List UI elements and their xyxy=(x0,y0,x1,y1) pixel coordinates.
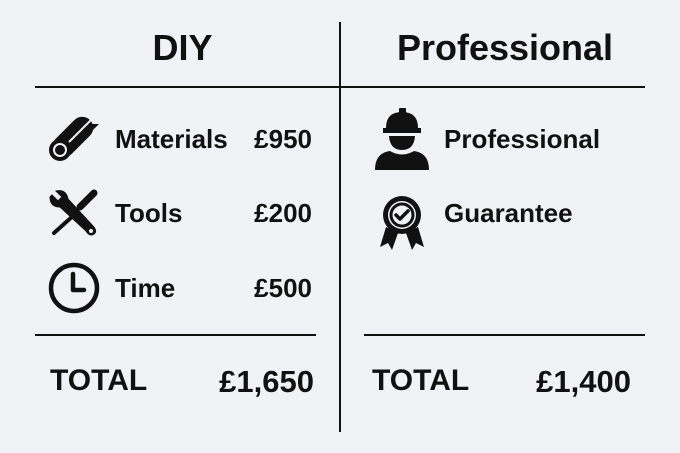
total rules xyxy=(35,334,316,336)
Professional total: TOTAL xyxy=(372,364,469,397)
icon: guarantee badge xyxy=(380,196,424,250)
value: 200: £200 xyxy=(254,198,312,228)
header rule xyxy=(35,86,645,88)
Professional total xyxy=(372,364,631,399)
Professional total: £1,400 xyxy=(536,364,631,399)
text: Professional: Professional xyxy=(444,124,600,154)
value: 950: £950 xyxy=(254,124,312,154)
DIY total xyxy=(50,364,314,399)
icon: material roll xyxy=(49,116,99,161)
text: Materials: Materials xyxy=(115,124,228,154)
icon: clock xyxy=(48,262,100,314)
heading: Professional: Professional xyxy=(397,27,613,68)
DIY total: £1,650 xyxy=(219,364,314,399)
DIY total: TOTAL xyxy=(50,364,147,397)
icon: worker xyxy=(375,108,429,170)
text: Tools: Tools xyxy=(115,198,182,228)
value: 500: £500 xyxy=(254,273,312,303)
vertical divider xyxy=(339,22,341,432)
heading: DIY: DIY xyxy=(152,27,212,68)
text: Guarantee: Guarantee xyxy=(444,198,573,228)
text: Time: Time xyxy=(115,273,175,303)
icon: tools xyxy=(50,190,98,236)
